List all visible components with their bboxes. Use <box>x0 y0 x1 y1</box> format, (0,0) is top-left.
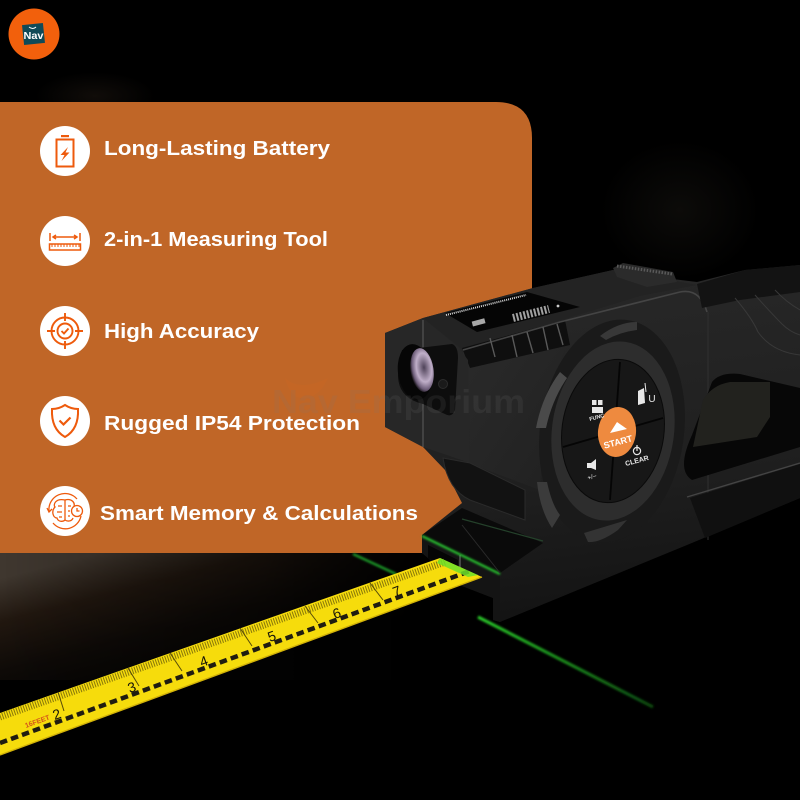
lens <box>394 342 436 402</box>
tape numbers: 7 <box>390 582 403 600</box>
lens plate <box>398 344 458 415</box>
start arrow <box>610 422 627 433</box>
unit label <box>638 383 656 405</box>
fine graduation ticks <box>0 562 445 717</box>
tray upper green edge <box>462 519 543 541</box>
panel: features <box>0 102 532 553</box>
sensor dot <box>438 380 448 388</box>
black measurement blocks <box>0 571 470 743</box>
lens glass <box>408 347 436 393</box>
dial bevel lower left <box>537 482 560 528</box>
handle inner surface <box>693 382 770 447</box>
tray front <box>422 537 500 622</box>
icon: battery <box>40 126 90 176</box>
tape numbers: 2 <box>50 705 63 723</box>
icon: ruler <box>40 216 90 266</box>
dial bevel left <box>536 372 567 428</box>
icon: brain <box>40 486 90 536</box>
dial outer ring <box>525 310 699 552</box>
green tip glow <box>437 558 478 577</box>
tape numbers: 4 <box>197 652 210 670</box>
dial <box>525 310 699 552</box>
green laser line left <box>353 554 396 574</box>
watermark text: Nav Emporium <box>272 383 525 420</box>
lower grip <box>690 464 800 538</box>
tray top <box>422 508 543 573</box>
front face seam <box>422 320 424 447</box>
feature: battery <box>40 126 331 176</box>
glossy strip <box>462 320 570 368</box>
volume label <box>587 459 598 482</box>
start label: START <box>603 433 634 451</box>
measuring tape <box>0 558 482 755</box>
feature: accuracy <box>40 306 260 356</box>
head ridges <box>490 324 563 357</box>
volume label: +/− <box>587 473 598 482</box>
device: laser measure <box>385 263 800 622</box>
icon: shield <box>40 396 90 446</box>
tray opening <box>428 545 458 577</box>
clear label <box>625 445 650 468</box>
tape brand label: 16FEET <box>24 714 51 730</box>
label: High Accuracy <box>104 320 260 343</box>
button dividers <box>563 362 663 500</box>
logo tag <box>22 23 45 45</box>
hinge under head <box>443 458 525 520</box>
tape numbers: 3 <box>125 678 138 696</box>
func label <box>589 400 605 423</box>
func label: FUNC <box>589 413 605 423</box>
logo <box>8 8 60 60</box>
handle top <box>697 265 800 308</box>
unit label: U <box>648 394 656 405</box>
feature: memory <box>40 486 418 536</box>
handle contour lines <box>735 290 800 355</box>
tray green edge <box>422 536 500 574</box>
side of head <box>463 322 575 490</box>
logo smile <box>29 27 36 28</box>
clear label: CLEAR <box>625 455 650 468</box>
tray seam <box>459 555 461 585</box>
label: Long-Lasting Battery <box>104 137 331 160</box>
top edge highlight <box>463 291 707 350</box>
start button <box>595 405 639 459</box>
grip knob <box>613 263 677 287</box>
tape body <box>0 558 482 755</box>
tape numbers: 6 <box>330 604 343 622</box>
housing seam <box>707 312 709 540</box>
bright lower edge <box>0 577 482 755</box>
dial bevel top <box>600 322 637 340</box>
logo text: Nav <box>24 30 44 42</box>
base tray <box>422 508 543 622</box>
dial bevel bottom <box>584 520 627 542</box>
tape numbers <box>50 582 403 723</box>
icon: target <box>40 306 90 356</box>
body silhouette <box>385 265 800 622</box>
feature: measuring tool <box>40 216 328 266</box>
tape numbers: 5 <box>265 627 278 645</box>
label: Smart Memory & Calculations <box>100 502 418 525</box>
lower grip highlight <box>687 463 800 497</box>
front face <box>385 318 470 463</box>
label: Rugged IP54 Protection <box>104 412 360 435</box>
green laser line right <box>478 617 653 707</box>
logo disc <box>8 8 60 60</box>
tray inner edge <box>462 525 500 573</box>
feature: protection <box>40 396 360 446</box>
button disc <box>552 353 674 509</box>
top face <box>423 270 697 350</box>
watermark mark <box>285 378 328 398</box>
inch divisions <box>58 583 383 711</box>
screen <box>445 292 580 332</box>
handle opening <box>684 374 800 480</box>
watermark <box>272 378 525 420</box>
dial middle ring <box>540 333 686 529</box>
background <box>0 84 706 680</box>
label: 2-in-1 Measuring Tool <box>104 228 328 251</box>
